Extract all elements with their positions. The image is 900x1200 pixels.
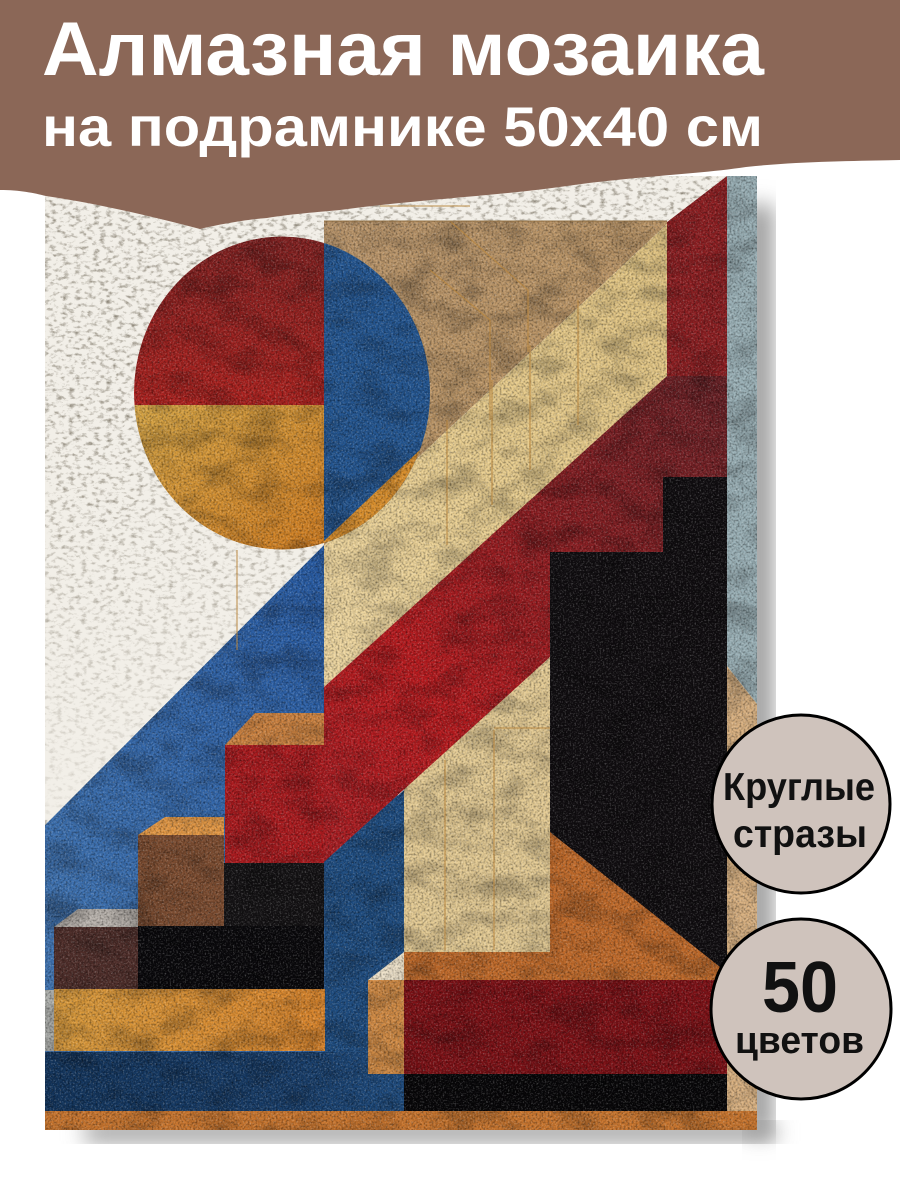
badge: 50 colours (711, 919, 891, 1099)
badge: round rhinestones: стразы (733, 813, 867, 856)
orange bar (54, 989, 325, 1051)
cream diagonal band (324, 224, 667, 687)
upper left red quadrant (130, 230, 324, 405)
black base band (404, 1074, 727, 1111)
badge: 50 colours: цветов (735, 1020, 864, 1062)
badge: 50 colours: 50 (762, 948, 838, 1028)
blue diagonal triangle (45, 545, 404, 1112)
brown box (138, 817, 224, 926)
bottom orange strip (45, 1111, 757, 1130)
badge: round rhinestones (712, 715, 890, 893)
orange top plate (404, 832, 727, 980)
painting: white background (45, 176, 727, 1130)
small dark brown box (54, 909, 138, 989)
black tower (550, 477, 727, 980)
lower cream panel (404, 657, 550, 952)
lower left orange quadrant (130, 405, 324, 555)
canvas drop shadow (85, 205, 775, 1142)
black blocks (138, 863, 324, 989)
tan upper panel (324, 221, 667, 546)
grey strip (45, 990, 54, 1051)
orange block side (368, 980, 404, 1074)
floor dark band (45, 1052, 404, 1112)
painted fine lines (237, 206, 667, 950)
title: Алмазная мозаика (42, 7, 765, 92)
subtitle: на подрамнике 50х40 см (42, 95, 763, 158)
canvas side edge upper (727, 176, 757, 704)
painting on stretcher (45, 176, 757, 1130)
badge: round rhinestones: Круглые (723, 766, 875, 809)
painting: colour shapes with paint grain (45, 176, 757, 1130)
dark red stepped band (324, 376, 727, 862)
dark blue column (324, 790, 404, 1112)
right blue half (324, 243, 430, 543)
white small corner (368, 952, 404, 980)
red cube (225, 713, 324, 863)
circle (130, 230, 434, 556)
dark red block (404, 980, 727, 1074)
top right red wedge (667, 176, 727, 378)
canvas side edge lower (727, 666, 757, 1111)
orange wedge (324, 450, 420, 543)
header banner (0, 0, 900, 229)
